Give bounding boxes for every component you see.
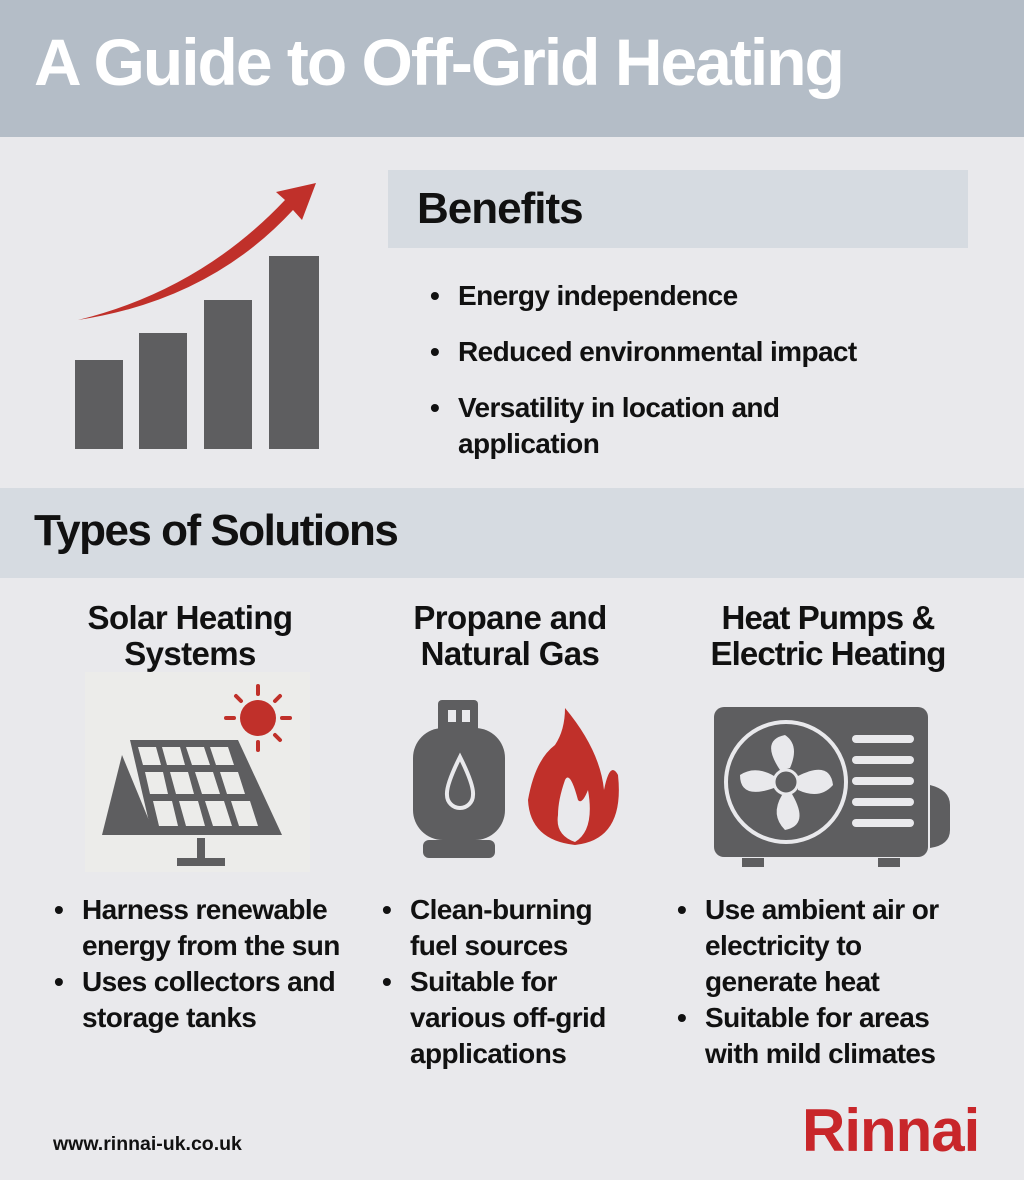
list: propane: Suitable for various off-grid applications [410,966,606,1069]
title: A Guide to Off-Grid Heating [34,25,843,99]
column heading: propane: Propane and [413,599,607,636]
list: heat pumps [678,894,939,1069]
types band [0,488,1024,578]
column heading: heat pumps: Heat Pumps & [722,599,934,636]
chart icon [75,183,319,449]
icon: heat pump [714,707,950,867]
list: solar [54,894,340,1033]
list: propane: Clean-burning fuel sources [410,894,592,961]
benefits list [430,280,857,459]
column heading: propane: Natural Gas [421,635,599,672]
benefits list: Energy independence [458,280,738,311]
header [0,0,1024,137]
benefits heading: Benefits [417,184,583,233]
list: heat pumps: Use ambient air or electricity to generate heat [705,894,939,997]
column heading: solar: Solar Heating [88,599,292,636]
column heading: propane [413,599,607,672]
column heading: solar [88,599,292,672]
types band: Types of Solutions [34,506,397,555]
list: solar: Harness renewable energy from the sun [82,894,340,961]
column heading: heat pumps: Electric Heating [710,635,946,672]
footer url: www.rinnai-uk.co.uk [53,1133,242,1155]
icon: solar panel [102,684,292,866]
list: heat pumps: Suitable for areas with mild climates [705,1002,935,1069]
benefits heading [388,170,968,248]
benefits list: Versatility in location and application [458,392,779,459]
icon: gas bottle and flame [413,700,619,858]
logo: Rinnai [802,1097,979,1164]
list: solar: Uses collectors and storage tanks [82,966,335,1033]
column heading: solar: Systems [124,635,256,672]
column heading: heat pumps [710,599,946,672]
list: propane [382,894,606,1069]
benefits list: Reduced environmental impact [458,336,857,367]
